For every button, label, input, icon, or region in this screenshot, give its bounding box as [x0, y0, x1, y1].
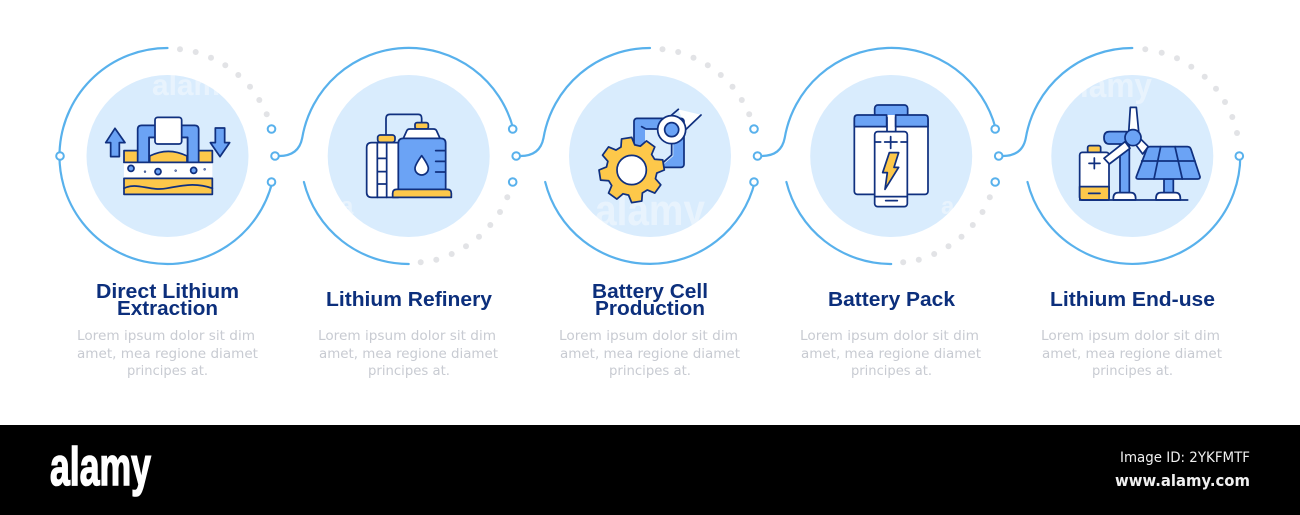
heading 3: Battery Cell — [592, 281, 708, 303]
watermark fragment 5: lamy — [1080, 67, 1152, 105]
body text 2: principes at. — [368, 364, 450, 379]
heading 3 — [592, 281, 708, 320]
heading 1 — [96, 281, 239, 320]
body text 1: Lorem ipsum dolor sit dim — [77, 329, 255, 344]
ring 1 — [56, 46, 279, 264]
body text 2: amet, mea regione diamet — [319, 347, 498, 362]
body text 2 — [318, 329, 498, 379]
body text 5 — [1041, 329, 1222, 379]
body text 4 — [800, 329, 981, 379]
watermark fragment 2: a — [340, 193, 354, 220]
body text 3 — [559, 329, 740, 379]
panel: Direct Lithium Extraction — [56, 46, 279, 379]
body text 4: amet, mea regione diamet — [801, 347, 981, 362]
website: www.alamy.com — [1115, 471, 1250, 490]
body text 2: Lorem ipsum dolor sit dim — [318, 329, 496, 344]
watermark fragment 3: alamy — [595, 186, 705, 235]
panel: Lithium Refinery — [279, 48, 520, 379]
icon: gear and robot arm — [599, 109, 702, 203]
disk 3 — [569, 75, 731, 237]
panel: Battery Pack — [762, 48, 1002, 379]
watermark fragment 4: a — [941, 193, 955, 220]
disk 5 — [1051, 75, 1213, 237]
body text 1 — [77, 329, 258, 379]
body text 1: principes at. — [127, 364, 208, 379]
ring 5 — [1003, 46, 1243, 264]
icon: lithium extraction — [106, 117, 230, 194]
disk 4 — [810, 75, 972, 237]
heading 1: Extraction — [117, 298, 218, 320]
image id: Image ID: 2YKFMTF — [1120, 450, 1250, 466]
body text 5: principes at. — [1092, 364, 1173, 379]
logo: alamy: alamy — [50, 437, 151, 497]
ring 3 — [520, 46, 761, 264]
heading 4: Battery Pack — [828, 289, 956, 311]
icon: battery, wind turbine and solar panel — [1080, 107, 1200, 200]
ring 4 — [762, 48, 1002, 265]
panel: Lithium End-use — [1003, 46, 1243, 379]
heading 2: Lithium Refinery — [326, 289, 493, 311]
body text 5: amet, mea regione diamet — [1042, 347, 1222, 362]
footer band — [0, 425, 1300, 515]
disk 2 — [328, 75, 490, 237]
body text 1: amet, mea regione diamet — [77, 347, 258, 362]
body text 3: principes at. — [609, 364, 691, 379]
icon: battery pack — [854, 105, 928, 207]
disk 1 — [86, 75, 248, 237]
heading 5: Lithium End-use — [1050, 289, 1215, 311]
heading 3: Production — [595, 298, 705, 320]
ring 2 — [279, 48, 520, 265]
panel: Battery Cell Production — [520, 46, 761, 379]
heading 1: Direct Lithium — [96, 281, 239, 303]
icon: refinery tanks — [367, 114, 451, 197]
watermark fragment 1: alam — [152, 69, 220, 102]
body text 3: Lorem ipsum dolor sit dim — [559, 329, 738, 344]
body text 4: principes at. — [851, 364, 932, 379]
body text 5: Lorem ipsum dolor sit dim — [1041, 329, 1220, 344]
body text 3: amet, mea regione diamet — [560, 347, 740, 362]
body text 4: Lorem ipsum dolor sit dim — [800, 329, 979, 344]
